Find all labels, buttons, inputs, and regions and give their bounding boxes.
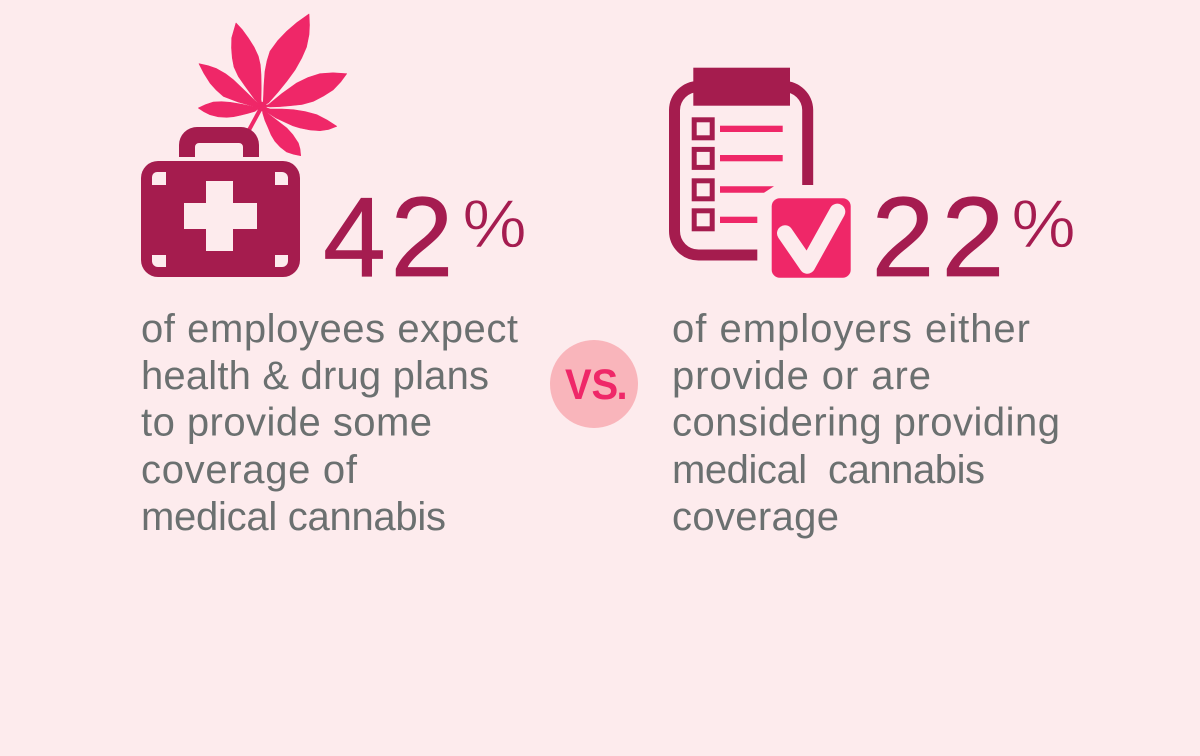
stat: 42% bbox=[323, 174, 527, 300]
icon: medical kit bbox=[141, 127, 300, 277]
text: employers description: of employers either bbox=[672, 307, 1030, 351]
text: employees description: of employees expect bbox=[141, 307, 518, 351]
text: employers description bbox=[672, 307, 1060, 539]
text: employees description: medical cannabis bbox=[141, 495, 446, 539]
text: employees description: health & drug plans bbox=[141, 354, 489, 398]
icon: clipboard checklist bbox=[674, 68, 851, 278]
text: employers description: considering providing bbox=[672, 400, 1060, 444]
badge: vs bbox=[550, 340, 638, 428]
stat: 22%: % bbox=[1012, 186, 1076, 262]
stat: 22%: 22 bbox=[872, 174, 1004, 300]
stat: 22% bbox=[872, 174, 1076, 300]
icon: cannabis leaf bbox=[198, 14, 347, 156]
stat: 42%: % bbox=[462, 186, 527, 262]
text: employers description: provide or are bbox=[672, 354, 931, 398]
text: employers description: coverage bbox=[672, 495, 839, 539]
text: employees description bbox=[141, 307, 518, 539]
text: employers description: medical cannabis bbox=[672, 448, 985, 492]
stat: 42%: 42 bbox=[323, 174, 453, 300]
badge: vs: VS. bbox=[565, 361, 628, 408]
panel: employees bbox=[141, 14, 527, 539]
text: employees description: to provide some bbox=[141, 400, 432, 444]
panel: employers bbox=[672, 68, 1076, 539]
text: employees description: coverage of bbox=[141, 448, 358, 492]
